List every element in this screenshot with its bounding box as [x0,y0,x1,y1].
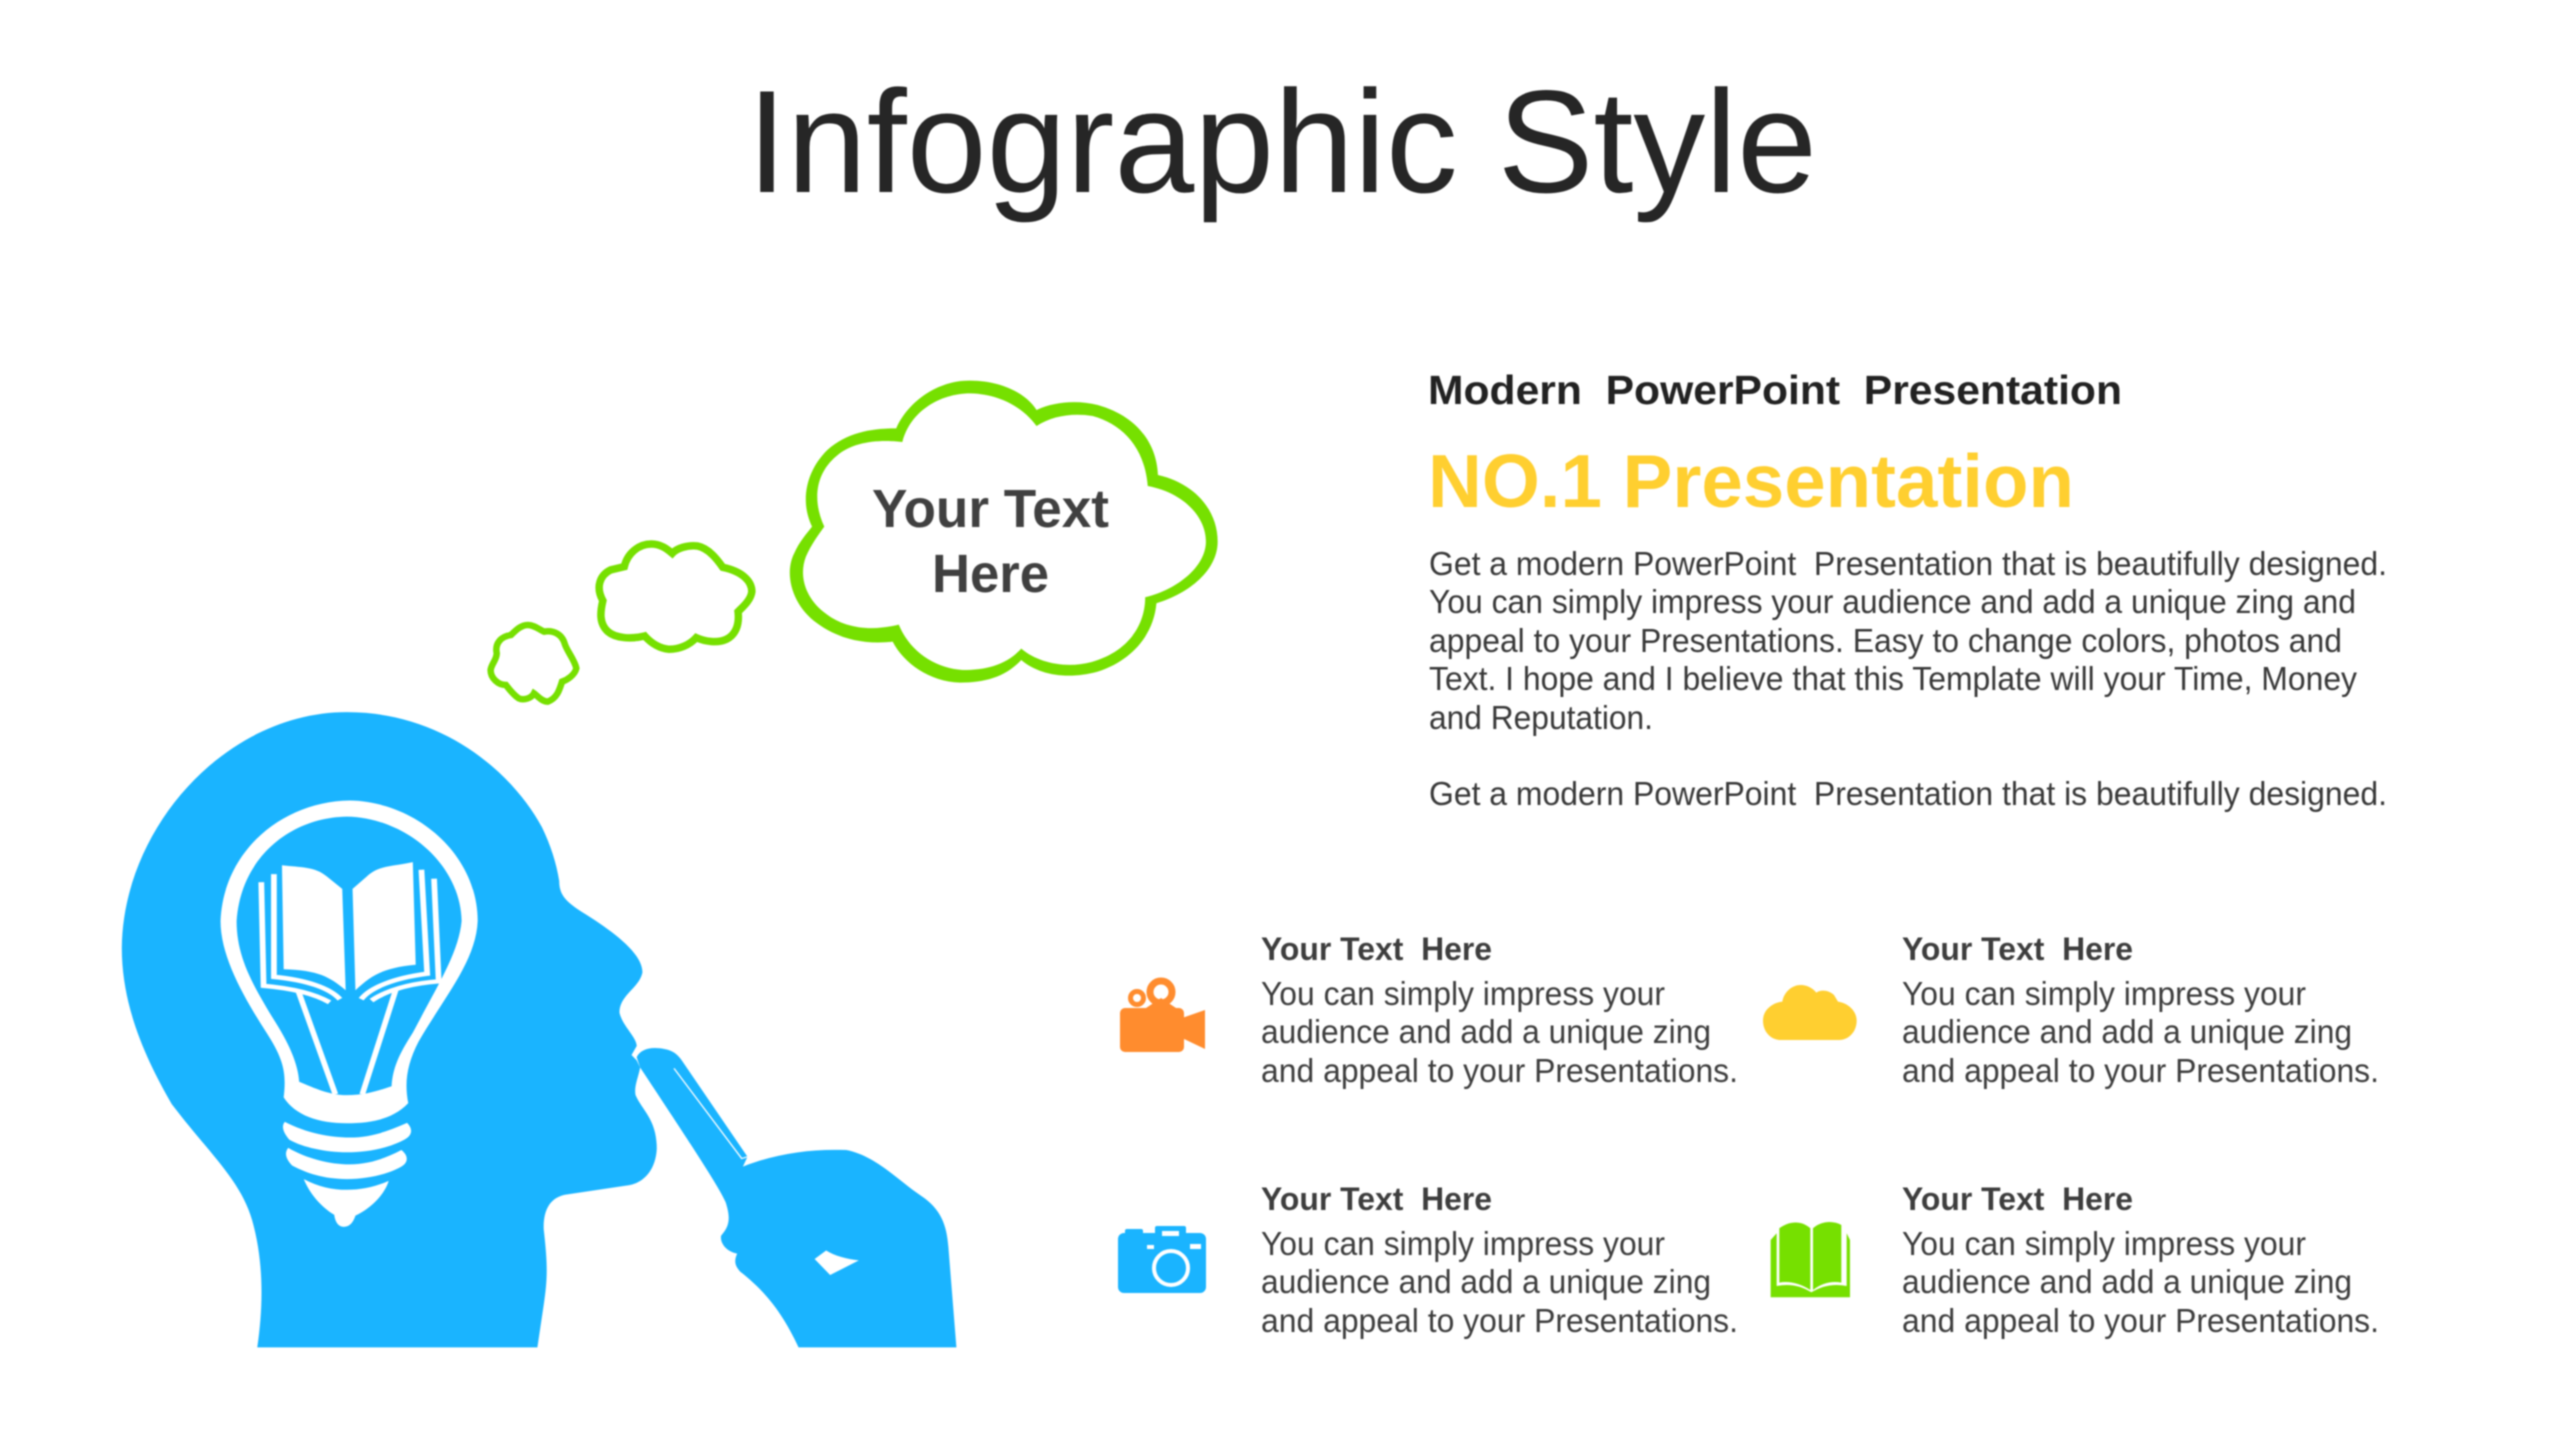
small cloud [491,625,576,702]
title: Infographic Style [747,60,1817,223]
icon: camera [1118,1226,1206,1293]
item text [1902,1181,2379,1339]
description paragraph: You can simply impress your audience and add a unique zing and [1429,583,2356,620]
icon: book [1771,1222,1850,1297]
item text: You can simply impress your [1902,1225,2306,1262]
head silhouette [122,712,657,1347]
item text: audience and add a unique zing [1261,1263,1711,1300]
medium cloud [599,544,752,649]
cloud text: Here [932,544,1049,604]
feature item: cloud [1763,931,2379,1089]
item text: and appeal to your Presentations. [1902,1302,2379,1339]
feature item: video camera [1120,931,1738,1089]
cloud text: Your Text [872,479,1109,539]
description paragraph: Get a modern PowerPoint Presentation that is beautifully designed. [1429,545,2387,582]
item text: You can simply impress your [1902,975,2306,1012]
yellow headline: NO.1 Presentation [1428,439,2074,523]
description paragraph: Get a modern PowerPoint Presentation that is beautifully designed. [1429,775,2387,812]
item text: and appeal to your Presentations. [1261,1302,1738,1339]
illustration: thinking head with light bulb [122,712,956,1347]
description paragraph: and Reputation. [1429,699,1653,736]
feature item: camera [1118,1181,1738,1339]
item text: audience and add a unique zing [1261,1013,1711,1050]
hand holding pen [637,1048,956,1347]
description paragraph: Text. I hope and I believe that this Template will your Time, Money [1429,660,2357,697]
thought clouds [491,381,1218,702]
item text: Your Text Here [1261,1181,1492,1217]
item text: audience and add a unique zing [1902,1263,2352,1300]
subheading: Modern PowerPoint Presentation [1428,367,2122,413]
item text: Your Text Here [1902,931,2133,967]
feature item: book [1771,1181,2379,1339]
item text [1261,931,1738,1089]
item text: Your Text Here [1902,1181,2133,1217]
description paragraph [1429,545,2387,812]
item text [1261,1181,1738,1339]
item text: and appeal to your Presentations. [1902,1052,2379,1089]
description paragraph: appeal to your Presentations. Easy to change colors, photos and [1429,622,2342,659]
cloud text [872,479,1109,604]
item text: and appeal to your Presentations. [1261,1052,1738,1089]
item text: You can simply impress your [1261,1225,1665,1262]
large cloud [790,381,1218,683]
light bulb icon [221,801,478,1227]
item text [1902,931,2379,1089]
icon: cloud [1763,985,1857,1040]
item text: Your Text Here [1261,931,1492,967]
item text: audience and add a unique zing [1902,1013,2352,1050]
icon: video camera [1120,981,1205,1052]
item text: You can simply impress your [1261,975,1665,1012]
